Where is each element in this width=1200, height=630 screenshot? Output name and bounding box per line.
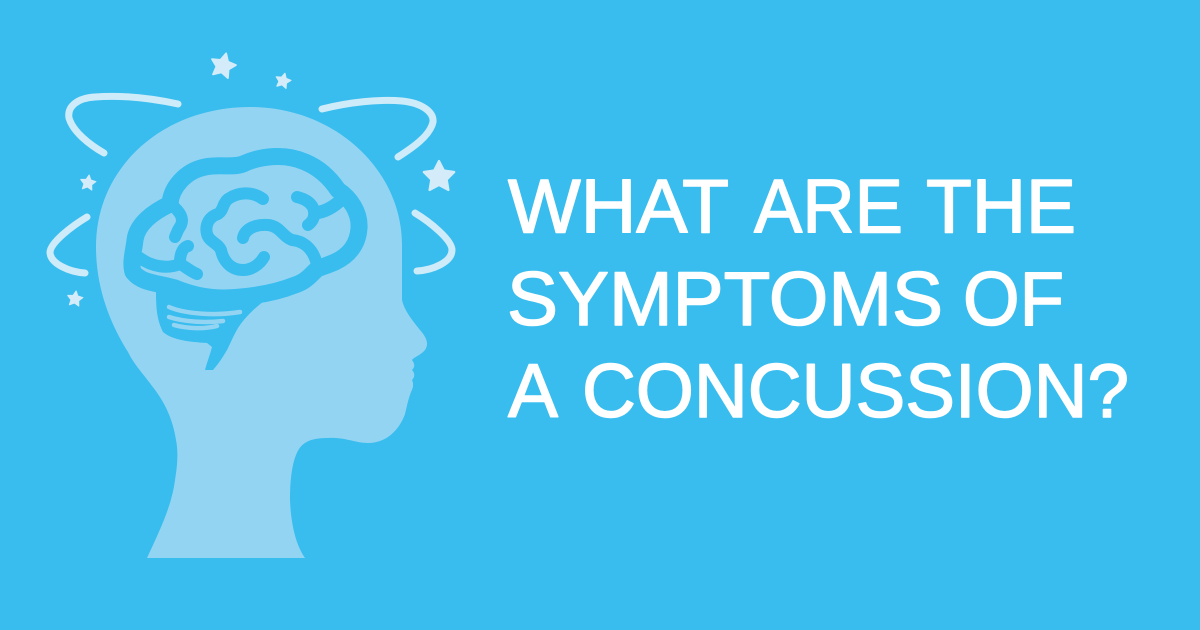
title: A bbox=[508, 349, 558, 434]
icon: concussed child head with brain bbox=[50, 50, 454, 558]
sulcus: right with branch bbox=[297, 197, 314, 225]
title bbox=[507, 164, 1129, 434]
brain bbox=[132, 156, 359, 370]
dizzy stars bbox=[67, 50, 454, 306]
sulcus: centre inner bbox=[243, 225, 316, 261]
title: THE bbox=[926, 164, 1076, 250]
brain outline bbox=[132, 156, 359, 298]
head silhouette bbox=[96, 107, 427, 558]
cerebellum and brain stem bbox=[156, 288, 268, 370]
title: WHAT bbox=[508, 164, 729, 250]
sulcus: centre outer bbox=[206, 193, 264, 270]
cerebellum folds bbox=[169, 307, 240, 328]
sulcus: lower left with branch bbox=[140, 258, 197, 274]
dizzy swirl arcs bbox=[50, 96, 452, 273]
title: ARE bbox=[754, 164, 903, 250]
sulcus: upper left bbox=[172, 205, 182, 237]
title: OF bbox=[963, 257, 1064, 342]
title: CONCUSSION? bbox=[582, 349, 1129, 434]
title: SYMPTOMS bbox=[507, 257, 943, 342]
